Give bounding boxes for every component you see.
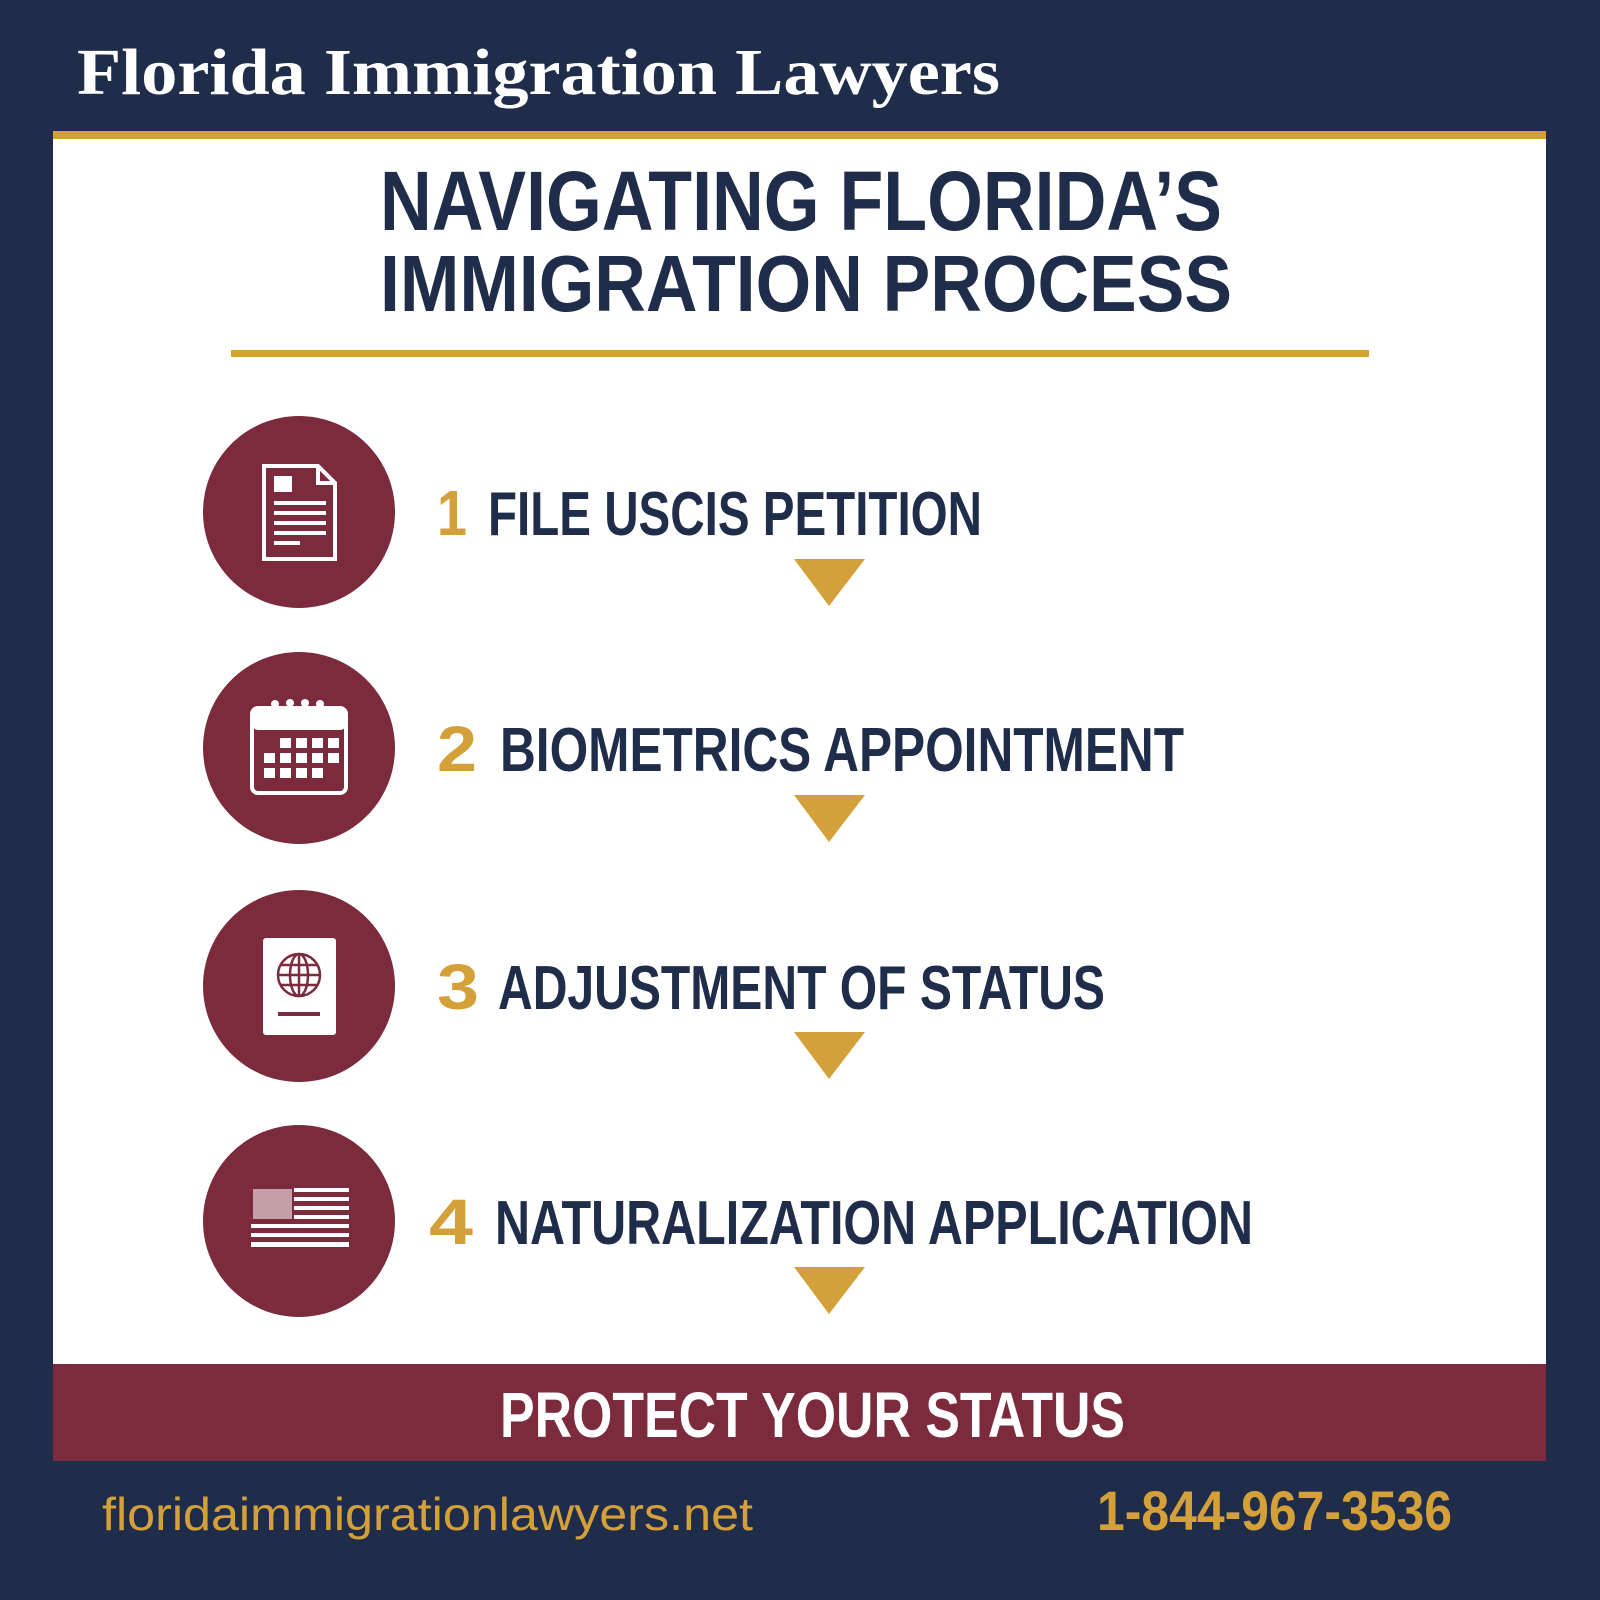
heading: NAVIGATING FLORIDA’S (380, 154, 1222, 248)
step 3 (203, 890, 1105, 1082)
banner: protect your status: PROTECT YOUR STATUS (500, 1379, 1125, 1451)
step 1: 1 (437, 477, 467, 549)
step 4: NATURALIZATION APPLICATION (495, 1189, 1253, 1258)
step 2: BIOMETRICS APPOINTMENT (500, 716, 1184, 785)
footer phone: 1-844-967-3536 (1097, 1479, 1452, 1542)
step 3: ADJUSTMENT OF STATUS (498, 954, 1105, 1023)
brand title: Florida Immigration Lawyers (77, 36, 1000, 109)
icon: calendar (252, 699, 346, 793)
step 2 (203, 652, 1184, 844)
heading (380, 154, 1232, 328)
arrow (794, 559, 865, 606)
heading: IMMIGRATION PROCESS (380, 239, 1232, 328)
step 4: 4 (429, 1186, 474, 1258)
main panel (53, 131, 1546, 1461)
arrow (794, 1267, 865, 1314)
step 1 (203, 416, 982, 608)
icon: flag (251, 1188, 349, 1247)
step 2: 2 (437, 713, 477, 785)
icon: passport (263, 938, 336, 1035)
arrow (794, 795, 865, 842)
step 3: 3 (437, 951, 479, 1023)
icon: document (264, 466, 335, 559)
step 4 (203, 1125, 1253, 1317)
footer website: floridaimmigrationlawyers.net (102, 1488, 753, 1540)
banner: protect your status (53, 1364, 1546, 1461)
step 1: FILE USCIS PETITION (488, 480, 982, 549)
arrow (794, 1032, 865, 1079)
